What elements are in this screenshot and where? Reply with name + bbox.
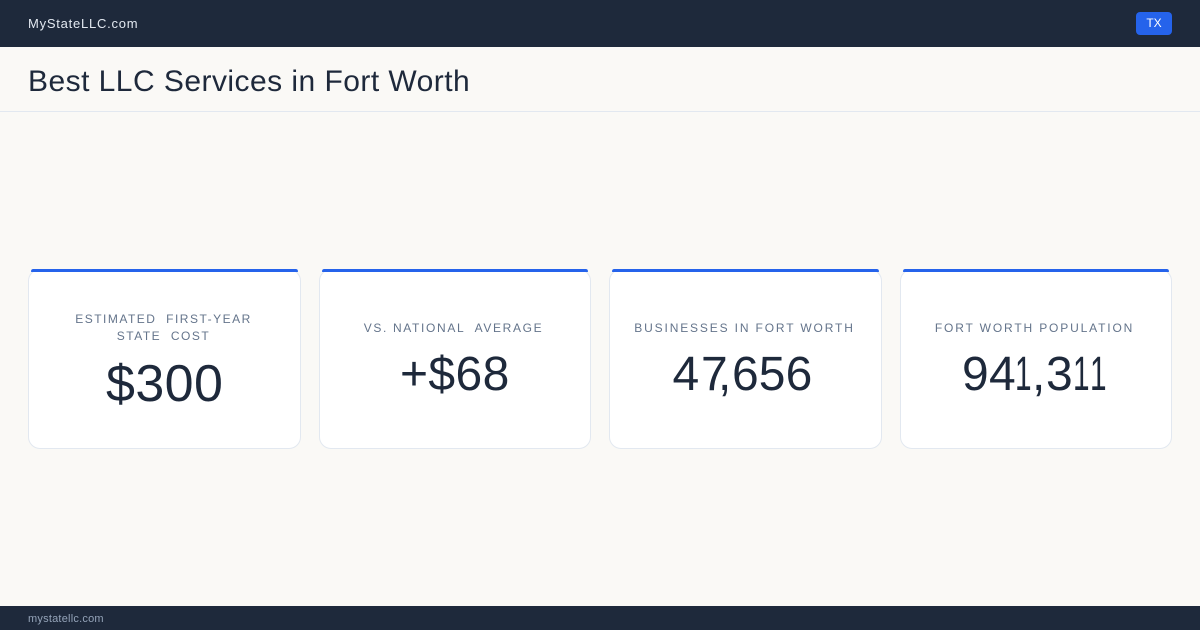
title band <box>0 47 1200 112</box>
stat value: 1 <box>1072 348 1089 401</box>
card accent <box>31 269 298 272</box>
state badge <box>1136 12 1172 35</box>
stat label: BUSINESSES IN FORT WORTH <box>634 321 855 335</box>
stat label: FORT WORTH POPULATION <box>935 321 1134 335</box>
stat card: national comparison <box>319 269 591 449</box>
stat value: 1 <box>1090 348 1106 401</box>
stat label: ESTIMATED FIRST-YEAR <box>75 312 252 326</box>
top header bar <box>0 0 1200 47</box>
stat value: 47,656 <box>672 348 812 401</box>
stat value: +$68 <box>400 348 510 401</box>
stat card: businesses <box>609 269 882 449</box>
card accent <box>322 269 588 272</box>
page title: Best LLC Services in Fort Worth <box>28 65 470 98</box>
stat label <box>75 312 252 343</box>
stat label: STATE COST <box>117 329 210 343</box>
footer bar <box>0 606 1200 630</box>
brand name: MyStateLLC.com <box>28 16 138 31</box>
stat value: $300 <box>106 355 223 413</box>
stat card: first-year cost <box>28 269 301 449</box>
state badge: TX <box>1146 16 1162 30</box>
stat card: population <box>900 269 1172 449</box>
stat value: 94 ,3 <box>962 348 1072 401</box>
stat value: 1 <box>1014 348 1031 401</box>
card accent <box>903 269 1169 272</box>
card accent <box>612 269 879 272</box>
stat label: VS. NATIONAL AVERAGE <box>364 321 543 335</box>
footer url: mystatellc.com <box>28 613 104 625</box>
